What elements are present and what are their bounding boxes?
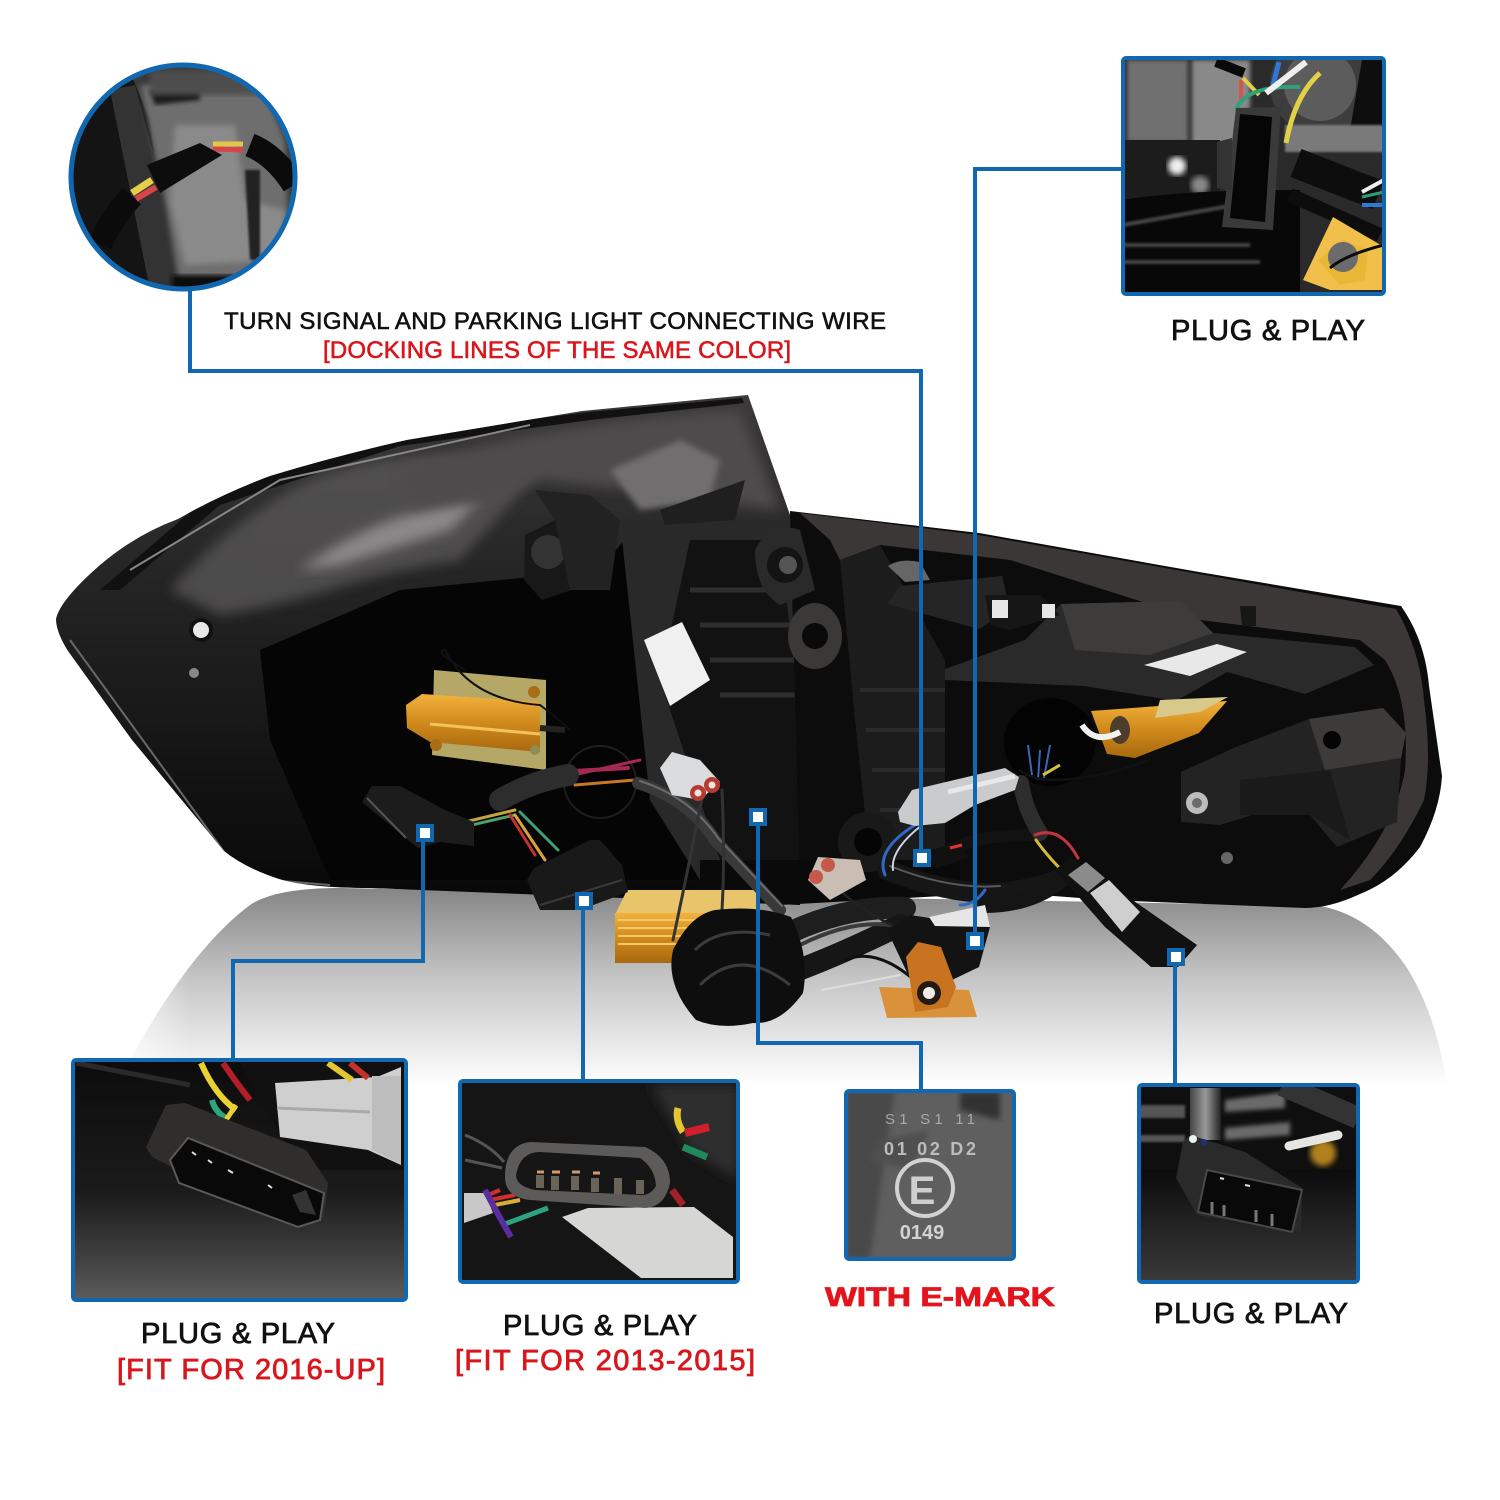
- gold resistor lower: [615, 890, 756, 963]
- leader line: top plug: [968, 169, 1123, 948]
- mounting grommets: [755, 528, 898, 872]
- right resistor: [1082, 697, 1228, 758]
- label: 2013-2015: [455, 1310, 755, 1377]
- upper sheen: [170, 456, 540, 615]
- inset: e-mark: S1 S1 11: [885, 1111, 975, 1128]
- central bracket panel: [622, 520, 794, 880]
- white connector: upper: [660, 752, 720, 801]
- heading: turn signal wire: [DOCKING LINES OF THE SAME COLOR]: [323, 337, 791, 364]
- harness bundle: [791, 908, 905, 932]
- black small connector: [930, 843, 968, 868]
- right socket circle: [1004, 698, 1096, 786]
- inset: e-mark: E: [909, 1169, 935, 1213]
- white connector: lower: [808, 857, 866, 900]
- white connector: [275, 1067, 401, 1165]
- dark recess: [260, 542, 677, 844]
- leader line: 2013-2015: [577, 894, 591, 1080]
- leader line: right plug: [1169, 950, 1183, 1085]
- lower centre fill: [700, 860, 960, 905]
- connector: dark block: [887, 905, 990, 1000]
- label: 2016-up: [FIT FOR 2016-UP]: [117, 1354, 385, 1386]
- connector: left 5 pin: [362, 786, 474, 848]
- heading: turn signal wire: [224, 308, 886, 364]
- left lamp housing: [50, 390, 860, 910]
- white sticker: [644, 622, 710, 706]
- inset: e-mark: 0149: [900, 1222, 944, 1244]
- connector: centre 5 pin: [527, 840, 628, 910]
- leader line: e-mark: [751, 810, 921, 1090]
- inset: top right plug: [1123, 35, 1384, 294]
- inset: plug 2016-up: [73, 1060, 406, 1300]
- inner slat area: [840, 545, 945, 860]
- knot: [671, 909, 805, 1026]
- wire harness: [440, 746, 1150, 990]
- label: top plug: PLUG & PLAY: [1171, 315, 1365, 347]
- inset: e-mark: 01 02 D2: [884, 1139, 976, 1159]
- floor reflection: [100, 880, 1447, 1090]
- inset: right plug: [1139, 1085, 1358, 1282]
- inset: plug 2013-2015: [460, 1081, 738, 1282]
- white label: [1144, 644, 1247, 676]
- label: 2013-2015: PLUG & PLAY: [503, 1310, 697, 1342]
- label: right plug: PLUG & PLAY: [1154, 1298, 1348, 1330]
- label: e-mark: WITH E-MARK: [825, 1282, 1056, 1312]
- label: 2013-2015: [FIT FOR 2013-2015]: [455, 1345, 755, 1377]
- right lamp housing: [790, 511, 1442, 908]
- label: 2016-up: [117, 1318, 385, 1386]
- main loop: [887, 870, 1062, 893]
- tail light assembly: [50, 390, 1442, 1026]
- connector: right plug: [1055, 857, 1197, 967]
- leader line: 2016-up: [233, 826, 432, 1060]
- inset: e-mark: [846, 1091, 1014, 1259]
- hex bolt: [524, 520, 572, 600]
- label: 2016-up: PLUG & PLAY: [141, 1318, 335, 1350]
- orange resistor small: [879, 942, 977, 1018]
- left resistor: [406, 650, 570, 770]
- right lamp bracket: [1181, 708, 1406, 847]
- right lamp upper block: [887, 576, 1010, 629]
- black leads: [673, 790, 724, 940]
- leader line: turn signal: [190, 285, 929, 865]
- inset: wire circle: [68, 62, 298, 292]
- right lamp plate: [945, 601, 1374, 701]
- white connector: right: [898, 768, 1019, 826]
- small stud: [189, 618, 213, 642]
- heading: turn signal wire: TURN SIGNAL AND PARKING LIGHT CONNECTING WIRE: [224, 308, 886, 335]
